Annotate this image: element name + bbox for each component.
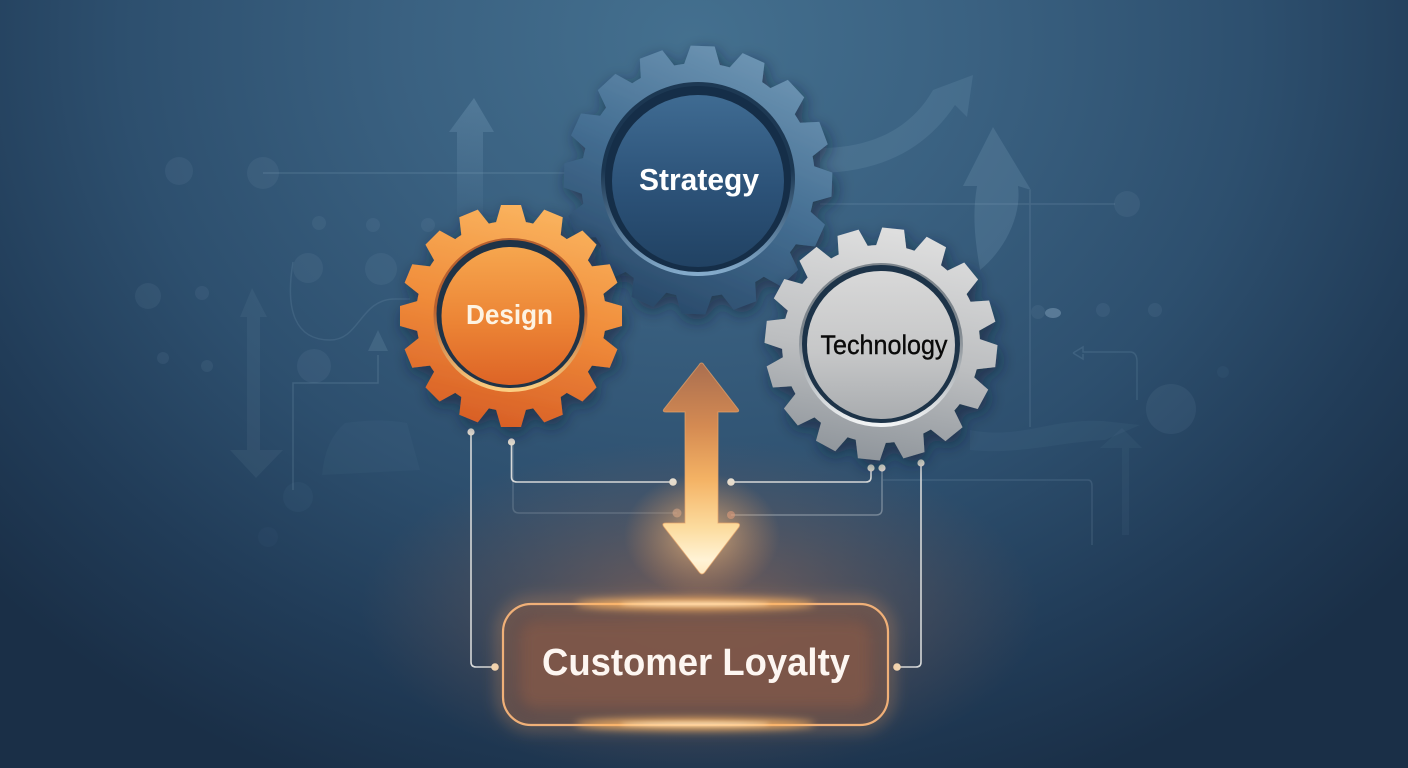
double-headed arrow — [624, 363, 780, 597]
label: Strategy: Strategy — [639, 162, 760, 197]
gear: Design — [390, 195, 632, 437]
ghost background motifs: upper arrows — [449, 75, 1031, 270]
ghost background motifs: left — [135, 157, 575, 547]
label: Design: Design — [466, 299, 553, 330]
warm glow behind arrow and box — [360, 440, 1040, 768]
gear: Strategy — [558, 44, 843, 328]
ghost background motifs: right — [820, 190, 1229, 545]
Customer Loyalty box — [503, 598, 888, 730]
label: Technology: Technology — [820, 330, 948, 360]
connector lines with dots — [467, 428, 925, 671]
connector lines: faint inner — [513, 445, 882, 519]
label: Customer Loyalty: Customer Loyalty — [542, 642, 850, 684]
gear: Technology — [755, 218, 1007, 470]
